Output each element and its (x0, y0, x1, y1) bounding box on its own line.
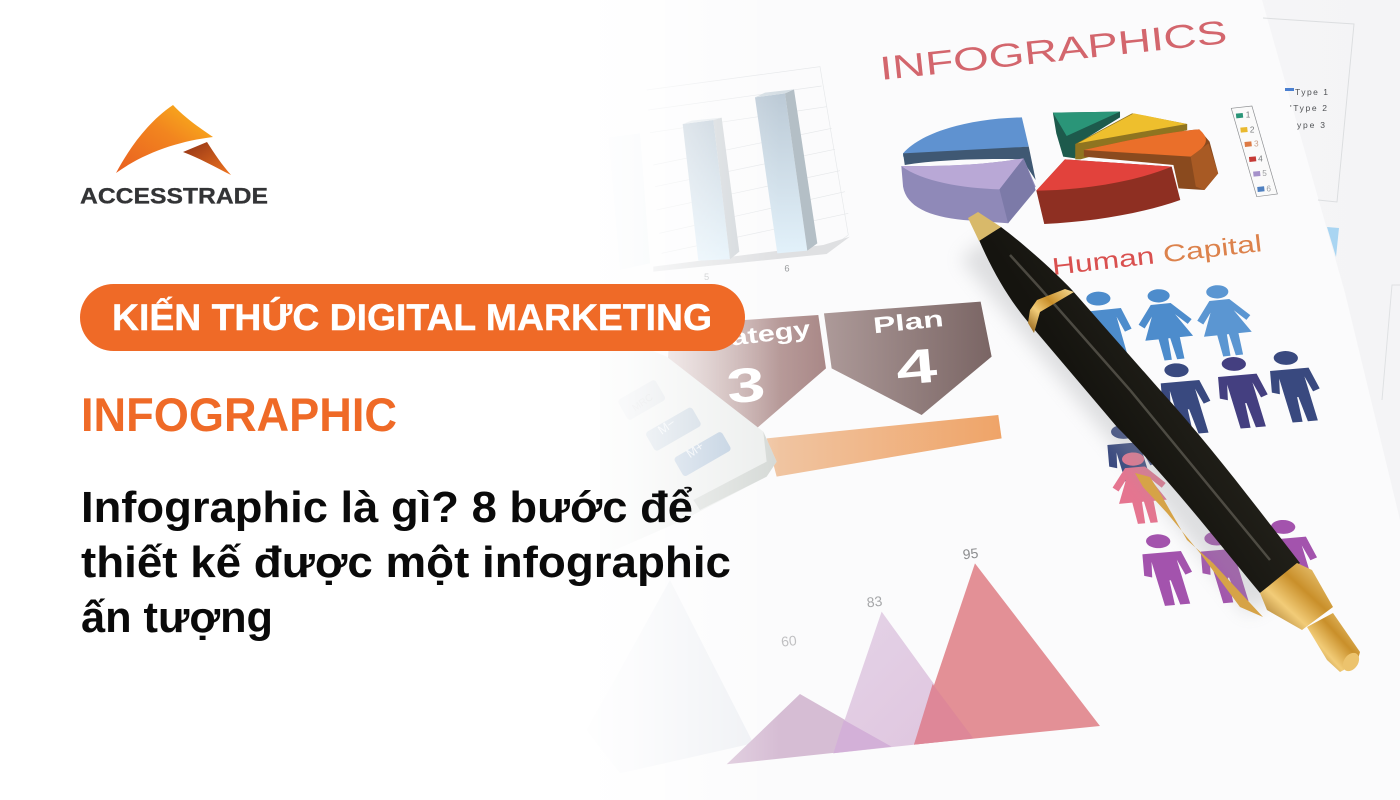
heading: INFOGRAPHICS on paper: INFOGRAPHICS (878, 13, 1229, 87)
pen tip (1307, 613, 1360, 672)
pen nib top (968, 212, 1001, 241)
main title: Infographic là gì? 8 bước để (81, 483, 693, 532)
main title: ấn tượng (81, 593, 273, 642)
pie legend: 6 (1266, 184, 1271, 193)
pen body (979, 227, 1300, 593)
type legend (1285, 87, 1328, 130)
bar chart: 6 (784, 264, 790, 274)
bar chart (608, 67, 850, 282)
type legend: 'Type 2 (1290, 103, 1327, 113)
triangle chart (587, 545, 1100, 773)
subheading: INFOGRAPHIC (81, 388, 397, 441)
type legend: Type 1 (1295, 87, 1328, 97)
calculator: M+ (684, 439, 706, 461)
pie chart (901, 112, 1218, 224)
pen gold cone (1260, 563, 1333, 630)
strategy and plan arrows: Plan (872, 305, 945, 338)
paper sheets (600, 0, 1400, 800)
strategy and plan arrows: 3 (725, 357, 767, 414)
triangle chart: 60 (780, 632, 798, 650)
logo wordmark: ACCESSTRADE (80, 184, 268, 208)
blue figures (1073, 283, 1260, 365)
pen band (1028, 289, 1074, 333)
main title (81, 483, 731, 642)
pie legend: 3 (1254, 140, 1259, 149)
strategy and plan arrows: ategy (729, 315, 812, 351)
pie legend (1231, 106, 1277, 197)
left white fade over photo (570, 0, 780, 800)
logo: ACCESSTRADE (80, 105, 268, 208)
calculator (600, 330, 777, 557)
category badge (80, 284, 745, 351)
type legend: ype 3 (1297, 120, 1325, 130)
strategy and plan arrows: 4 (894, 339, 939, 396)
bar chart: 5 (704, 272, 709, 282)
pen (961, 212, 1362, 674)
main title: thiết kế được một infographic (81, 538, 731, 587)
people pictograms (1073, 283, 1329, 607)
pie legend: 4 (1258, 154, 1263, 163)
pie legend: 2 (1250, 126, 1255, 135)
navy figures (1097, 349, 1329, 498)
triangle chart: 83 (866, 593, 883, 610)
pen clip (1135, 473, 1263, 617)
purple figures (1132, 518, 1326, 607)
calculator: MRC (630, 392, 655, 414)
calculator: M− (655, 416, 678, 437)
category badge: KIẾN THỨC DIGITAL MARKETING (112, 296, 712, 338)
logo mark (116, 105, 213, 173)
pie legend: 5 (1262, 169, 1267, 178)
triangle chart: 95 (962, 545, 979, 562)
heading: Human Capital: Human Capital (1051, 230, 1263, 281)
pink figure (1105, 450, 1174, 525)
strategy and plan arrows (667, 302, 1002, 477)
pie legend: 1 (1246, 111, 1251, 120)
